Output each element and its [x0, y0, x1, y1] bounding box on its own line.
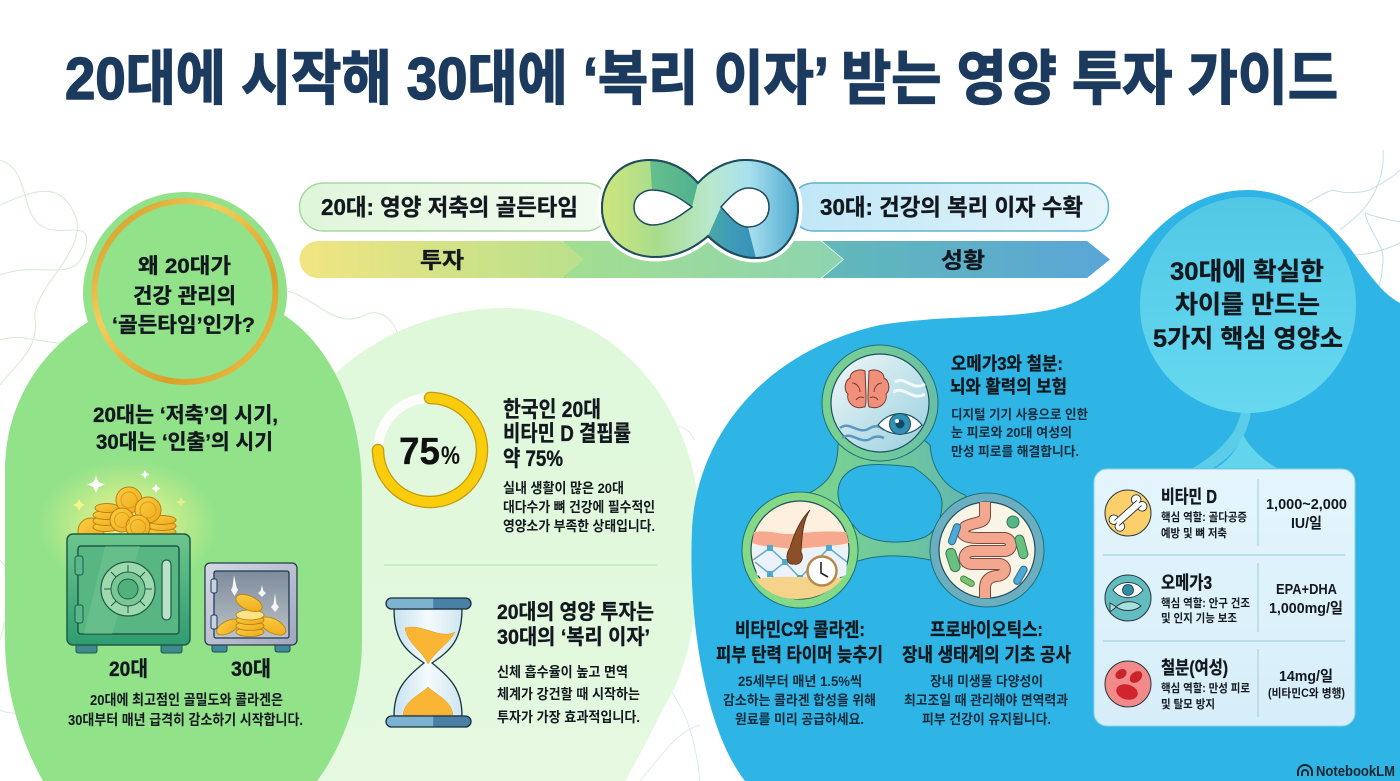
icon: infinity loop [602, 160, 798, 258]
text block: vitamin D deficiency: 한국인 20대 [503, 397, 601, 422]
row: omega-3 [1105, 573, 1343, 625]
text block: left caption: 30대부터 매년 급격히 감소하기 시작합니다. [68, 712, 303, 729]
text block: vitamin D deficiency: 실내 생활이 많은 20대 [503, 480, 624, 496]
arrow: 투자 to 성황 timeline: 투자 [420, 248, 464, 273]
row: iron: 철분(여성) [1161, 658, 1228, 678]
decorative background lines: left [0, 160, 401, 781]
panel: green left [5, 192, 362, 781]
text block: vitamin C and collagen: 피부 탄력 타이머 늦추기 [716, 644, 883, 666]
icon: skin collagen and clock [751, 501, 849, 599]
row: vitamin D [1105, 487, 1347, 540]
row: omega-3: 핵심 역할: 안구 건조 [1161, 596, 1250, 610]
heading: saving and withdrawal: 20대는 ‘저축’의 시기, [93, 404, 278, 427]
text block: left caption [68, 692, 303, 729]
heading: why golden time [94, 201, 276, 382]
panel: nutrient table card [1094, 469, 1355, 726]
text block: vitamin C and collagen: 감소하는 콜라겐 합성을 위해 [723, 693, 876, 708]
chart: 75% donut: % [441, 442, 460, 470]
heading: five core nutrients: 5가지 핵심 영양소 [1153, 325, 1343, 353]
banner: 20대 pill: 20대: 영양 저축의 골든타임 [321, 194, 578, 220]
heading: why golden time: 왜 20대가 [138, 255, 231, 278]
row: iron: 및 탈모 방지 [1161, 697, 1215, 711]
text block: compound interest: 신체 흡수율이 높고 면역 [497, 664, 628, 680]
row: vitamin D: 비타민 D [1161, 487, 1217, 507]
text block: omega-3 and iron: 디지털 기기 사용으로 인한 [951, 407, 1088, 422]
text block: vitamin C and collagen: 원료를 미리 공급하세요. [735, 712, 864, 727]
text block: vitamin D deficiency [503, 397, 655, 534]
heading: saving and withdrawal [93, 404, 278, 454]
arrow: 투자 to 성황 timeline: 성황 [941, 248, 985, 273]
label: 20대: 20대 [109, 658, 148, 681]
chart: 75% donut: 75 [399, 431, 440, 473]
row: omega-3: 및 인지 기능 보조 [1161, 611, 1237, 625]
heading: why golden time: ‘골든타임’인가? [112, 314, 255, 337]
banner: 30대 pill: 30대: 건강의 복리 이자 수확 [820, 194, 1083, 220]
row: omega-3: EPA+DHA [1276, 581, 1337, 598]
decorative background lines: bottom centre [640, 427, 700, 781]
heading: why golden time: 건강 관리의 [133, 285, 236, 308]
text block: vitamin D deficiency: 대다수가 뼈 건강에 필수적인 [503, 499, 655, 515]
heading: five core nutrients [1140, 197, 1356, 468]
text block: vitamin C and collagen: 25세부터 매년 1.5%씩 [738, 674, 862, 689]
decorative background lines: right [1307, 150, 1400, 293]
row: iron: 핵심 역할: 만성 피로 [1161, 681, 1250, 695]
chart: three-node connector [742, 345, 1044, 608]
text block: probiotics: 최고조일 때 관리해야 면역력과 [904, 693, 1069, 708]
text block: vitamin C and collagen [716, 619, 883, 727]
panel: pale green statistics [300, 308, 700, 781]
text block: compound interest [497, 601, 654, 725]
panel: blue nutrient background [691, 190, 1400, 781]
row: iron: (비타민C와 병행) [1268, 686, 1345, 700]
text block: left caption: 20대에 최고점인 골밀도와 콜라겐은 [90, 692, 283, 709]
icon: small grey safe [205, 563, 297, 652]
icon: brain and eye [831, 354, 929, 452]
text block: probiotics [902, 619, 1071, 727]
text block: omega-3 and iron: 뇌와 활력의 보험 [950, 377, 1067, 397]
text block: omega-3 and iron: 만성 피로를 해결합니다. [951, 444, 1079, 459]
row: vitamin D: 1,000~2,000 [1266, 496, 1347, 513]
heading: five core nutrients: 30대에 확실한 [1170, 258, 1324, 286]
text block: probiotics: 피부 건강이 유지됩니다. [922, 712, 1051, 727]
text block: compound interest: 체계가 강건할 때 시작하는 [497, 686, 640, 702]
heading: five core nutrients: 차이를 만드는 [1175, 291, 1320, 319]
text block: vitamin C and collagen: 비타민C와 콜라겐: [735, 619, 865, 641]
row: vitamin D: 핵심 역할: 골다공증 [1161, 510, 1247, 524]
text block: vitamin D deficiency: 영양소가 부족한 상태입니다. [503, 518, 655, 534]
label: 30대: 30대 [231, 658, 271, 681]
row: vitamin D: 예방 및 뼈 저축 [1161, 526, 1227, 540]
icon: hourglass [386, 598, 471, 727]
text block: vitamin D deficiency: 약 75% [503, 446, 563, 471]
heading: saving and withdrawal: 30대는 ‘인출’의 시기 [96, 431, 273, 454]
row: omega-3: 1,000mg/일 [1269, 600, 1343, 617]
text block: probiotics: 장내 생태계의 기초 공사 [902, 644, 1071, 666]
row: omega-3: 오메가3 [1161, 573, 1212, 593]
text block: compound interest: 30대의 ‘복리 이자’ [497, 626, 650, 649]
row: iron [1105, 658, 1345, 711]
banner: 20대 pill [300, 183, 610, 231]
text block: omega-3 and iron: 눈 피로와 20대 여성의 [951, 425, 1072, 440]
text block: vitamin D deficiency: 비타민 D 결핍률 [503, 421, 631, 446]
icon: intestine and microbes [939, 502, 1035, 598]
row: iron: 14mg/일 [1279, 668, 1333, 685]
icon: sparkles above coins [73, 470, 186, 511]
text block: compound interest: 투자가 가장 효과적입니다. [497, 709, 640, 725]
row: vitamin D: IU/일 [1291, 515, 1322, 532]
text block: compound interest: 20대의 영양 투자는 [497, 601, 654, 624]
banner: 30대 pill [790, 183, 1108, 231]
text block: probiotics: 프로바이오틱스: [930, 619, 1043, 641]
chart: 75% donut [378, 398, 482, 502]
arrow: 투자 to 성황 timeline [300, 241, 1110, 278]
icon: big green safe with coins [38, 460, 218, 653]
text block: omega-3 and iron: 오메가3와 철분: [951, 354, 1063, 374]
text block: probiotics: 장내 미생물 다양성이 [930, 674, 1043, 689]
text block: omega-3 and iron [950, 354, 1088, 459]
